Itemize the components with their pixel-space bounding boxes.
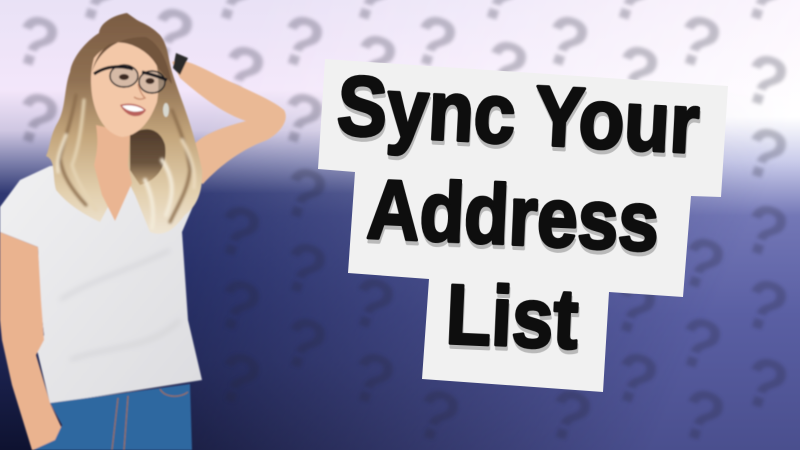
woman with glasses scratching her head [0, 13, 286, 450]
mouth [120, 104, 146, 116]
plaque background [318, 59, 728, 392]
title line 1: Sync Your [335, 58, 701, 171]
nose [134, 84, 145, 99]
eyes [119, 74, 154, 84]
jeans [33, 384, 192, 450]
title plaque [318, 58, 728, 392]
hair fringe [92, 37, 172, 84]
face [91, 40, 158, 137]
raised arm [172, 61, 286, 184]
neck and chest [94, 125, 132, 221]
dark hair under chin [130, 129, 166, 185]
hair strands [57, 95, 195, 228]
white t-shirt [0, 165, 202, 404]
title line 2: Address [365, 162, 661, 269]
lowered arm [0, 232, 72, 450]
watch [173, 53, 188, 75]
hair back [46, 13, 202, 234]
title line 3: List [444, 267, 580, 367]
earring [163, 103, 169, 117]
glasses [94, 65, 167, 93]
